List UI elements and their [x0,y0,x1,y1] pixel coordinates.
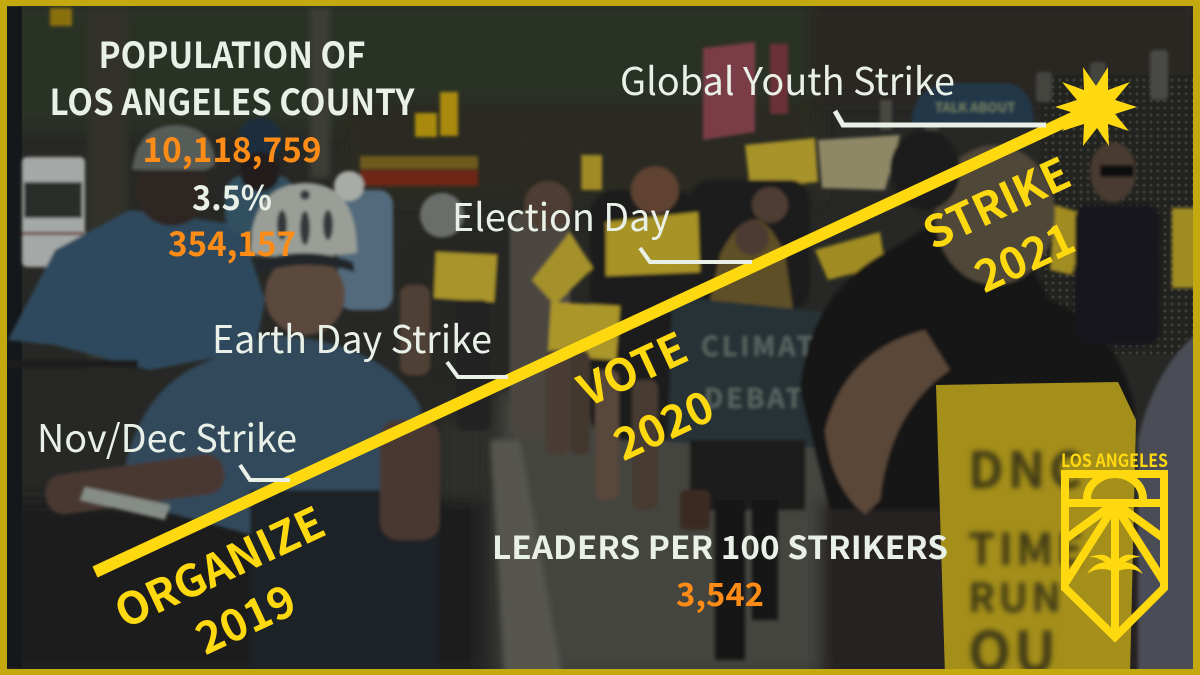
2021 label: 2021 [963,203,1084,305]
phase: Organize 2019 [103,488,334,667]
percentage: 3.5% [192,171,272,220]
leaders heading: LEADERS PER 100 STRIKERS [492,523,948,569]
3.5 percent number: 354,157 [168,217,296,266]
leader line: Global Youth Strike [835,111,1046,125]
photo background: street march: DEBATE [704,377,825,416]
phase: Strike 2021 [911,138,1084,305]
red shop sign [360,170,478,186]
label: Earth Day Strike: Earth Day Strike [212,309,492,364]
stat block: population of Los Angeles County [50,27,416,266]
Strike label: STRIKE [911,138,1079,262]
pink banner [703,42,755,140]
leaders number: 3,542 [676,570,764,616]
phase: Vote 2020 [565,313,723,473]
fence [1040,75,1200,355]
big foreground marcher [800,190,1135,510]
climate debate banner [668,296,825,448]
front cop [120,335,440,545]
photo background: street march: CLIMATE [701,325,836,364]
leader line: Nov/Dec Strike [240,465,290,480]
heading line 1: POPULATION OF [98,27,366,79]
left cop [8,210,265,370]
sun rays [1064,503,1166,638]
Organize label: ORGANIZE [103,488,334,641]
horizon bar [1061,499,1168,507]
timeline diagonal line [95,110,1090,572]
legs [545,350,569,455]
traffic lights [415,113,437,137]
leader line: Election Day [640,248,752,262]
large yellow sign: TIME [968,514,1087,578]
large yellow sign: RUN [968,566,1064,624]
icon: starburst at timeline end [1055,67,1137,146]
sun arc [1087,474,1143,499]
label: Nov/Dec Strike: Nov/Dec Strike [37,408,297,463]
background cop [338,190,393,310]
2020 label: 2020 [602,371,723,473]
front yellow signs [434,252,497,302]
gray right figure [1138,330,1200,675]
large yellow sign: DNC [968,431,1086,503]
sunglasses man [1075,205,1160,345]
van [22,157,85,267]
stat block: leaders per 100 strikers [492,523,948,616]
logo text: LOS ANGELES [1061,447,1168,473]
2019 label: 2019 [184,565,305,667]
label: Global Youth Strike: Global Youth Strike [620,51,955,106]
talk about philly banner [912,83,1034,125]
leader line: Earth Day Strike [447,362,508,377]
Vote label: VOTE [565,313,696,420]
back signs [520,138,582,190]
logo: Sunrise Los Angeles shield [1061,447,1168,638]
shield outline [1065,474,1164,637]
heading line 2: LOS ANGELES COUNTY [50,74,416,126]
label: Election Day: Election Day [452,187,670,242]
banner holder legs [690,440,805,510]
photo background: street march: TALK ABOUT [935,97,1015,116]
population number: 10,118,759 [142,123,322,172]
crowd [400,230,520,390]
large yellow sign [936,382,1136,675]
palm leaves [1087,555,1143,574]
